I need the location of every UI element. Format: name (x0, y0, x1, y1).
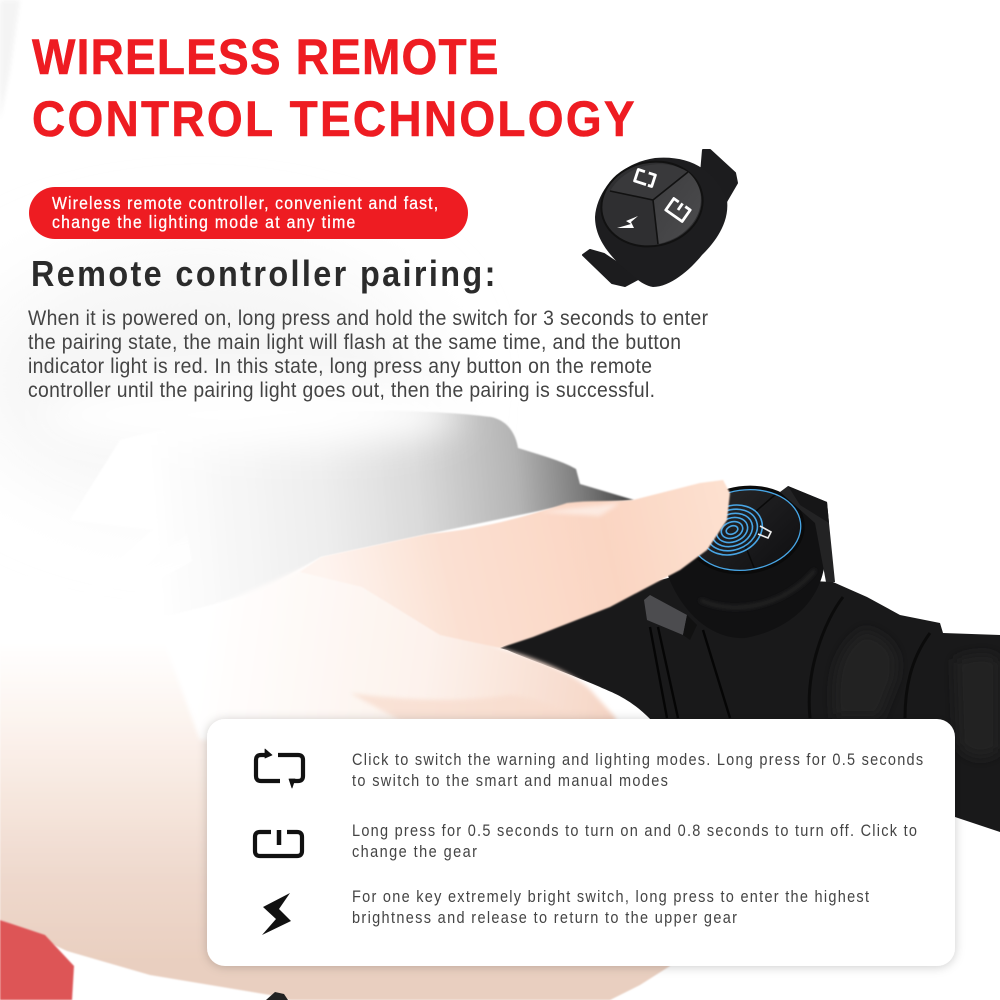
body (595, 158, 727, 287)
right clip (780, 486, 835, 582)
panel: button functions (207, 719, 955, 966)
remote face (682, 480, 808, 580)
right mounting clip (700, 150, 737, 207)
left mounting clip (583, 250, 640, 286)
icon: power (255, 830, 302, 856)
red pill callout (29, 187, 468, 239)
left clip (644, 595, 687, 635)
remote body (667, 495, 825, 638)
power description (352, 822, 917, 861)
mode description: Click to switch the warning and lighting modes. Long press for 0.5 seconds (352, 751, 923, 769)
faded sleeve at top left (0, 0, 20, 120)
bright switch description: brightness and release to return to the upper gear (352, 909, 737, 927)
power description: Long press for 0.5 seconds to turn on and 0.8 seconds to turn off. Click to (352, 822, 917, 840)
dark item at bottom (266, 992, 288, 1000)
black handlebar (500, 575, 1000, 832)
mode icon on remote (635, 170, 655, 186)
white finger highlight (540, 503, 620, 516)
face icon (758, 526, 771, 538)
title: CONTROL TECHNOLOGY (32, 92, 635, 147)
soft fade over the upper edge (40, 381, 460, 449)
red pill callout: change the lighting mode at any time (52, 212, 355, 232)
button dividers (610, 172, 688, 244)
red pill callout: Wireless remote controller, convenient and fast, (52, 193, 438, 213)
bright switch description (352, 888, 870, 927)
palm crease (350, 693, 590, 720)
pairing instructions text: the pairing state, the main light will flash at the same time, and the button (28, 330, 681, 354)
faded hand (0, 480, 730, 1000)
bright switch description: For one key extremely bright switch, long press to enter the highest (352, 888, 870, 906)
right button (653, 172, 701, 244)
title: WIRELESS REMOTE (32, 30, 498, 85)
button face (593, 152, 711, 256)
remote mounted on handlebar with fingerprint (644, 480, 835, 718)
faint background haze (0, 250, 430, 510)
fingerprint scan (684, 483, 806, 577)
mode description (352, 751, 923, 790)
top button (610, 164, 688, 200)
mode description: to switch to the smart and manual modes (352, 772, 668, 790)
power description: change the gear (352, 843, 477, 861)
forearm (0, 570, 670, 1000)
pairing instructions text: controller until the pairing light goes out, then the pairing is successful. (28, 378, 655, 402)
heading: remote controller pairing: Remote controller pairing: (31, 254, 495, 294)
product image: remote controller (583, 150, 737, 287)
blurred grey handlebar (40, 381, 634, 618)
red sleeve (0, 920, 74, 1000)
icon: mode cycle (256, 749, 303, 788)
finger (300, 480, 730, 648)
title (32, 30, 635, 147)
pairing instructions text: When it is powered on, long press and hold the switch for 3 seconds to enter (28, 306, 708, 330)
icon: lightning bolt (262, 893, 291, 935)
pairing instructions text (28, 306, 708, 402)
bolt icon on remote (617, 216, 638, 228)
power icon on remote (666, 198, 691, 221)
pairing instructions text: indicator light is red. In this state, long press any button on the remote (28, 354, 652, 378)
palm (160, 560, 616, 740)
